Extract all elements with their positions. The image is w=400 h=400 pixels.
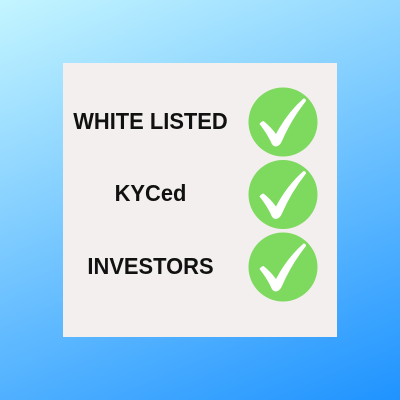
label: investors: INVESTORS xyxy=(87,253,214,279)
panel: checklist card xyxy=(63,63,337,337)
label: white listed: WHITE LISTED xyxy=(73,108,228,134)
label: KYCed: KYCed xyxy=(115,180,186,206)
icon: check 3 xyxy=(248,232,318,302)
icon: check 1 xyxy=(248,88,318,156)
icon: check 2 xyxy=(248,160,318,229)
